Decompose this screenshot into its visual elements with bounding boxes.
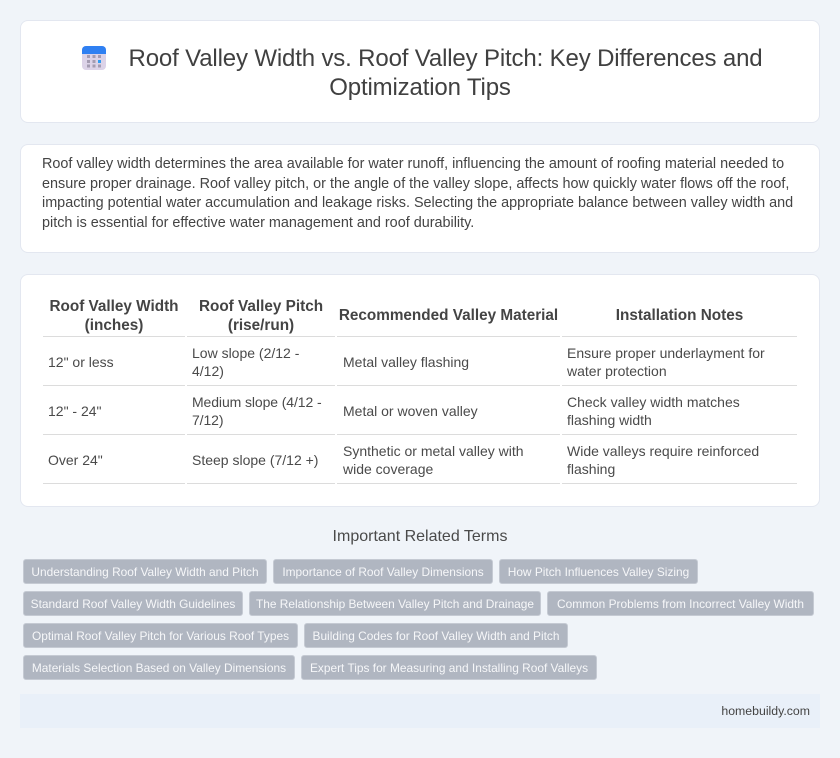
tag (547, 591, 814, 616)
tag (23, 623, 298, 648)
tag: Optimal Roof Valley Pitch for Various Roof Types (32, 629, 289, 643)
row 1 material: Metal valley flashing (343, 354, 469, 370)
column header: width: Roof Valley Width (49, 298, 179, 315)
column header: material: Recommended Valley Material (339, 307, 558, 324)
row 3 material: wide coverage (343, 461, 433, 477)
row 1 notes: water protection (567, 363, 667, 379)
row 2 width: 12" - 24" (48, 403, 102, 419)
column header: width (49, 298, 179, 334)
tag (301, 655, 597, 680)
related term tags (23, 559, 814, 680)
comparison table (43, 298, 797, 484)
intro panel (20, 144, 820, 253)
row 3 material (343, 443, 524, 477)
icon: calendar (82, 46, 106, 70)
tag (23, 591, 243, 616)
column header: width: (inches) (85, 317, 143, 334)
intro text: impacting potential water accumulation and leakage risks. Selecting the appropriate balance between valley width and (42, 195, 793, 211)
related terms heading: Important Related Terms (333, 528, 507, 545)
row 3 width: Over 24" (48, 452, 103, 468)
row 1 pitch: 4/12) (192, 363, 224, 379)
title: Optimization Tips (329, 74, 511, 101)
tag: Expert Tips for Measuring and Installing Roof Valleys (310, 661, 588, 675)
row 2 notes: flashing width (567, 412, 652, 428)
row 2 material: Metal or woven valley (343, 403, 478, 419)
tag: Standard Roof Valley Width Guidelines (31, 597, 235, 611)
tag: Building Codes for Roof Valley Width and Pitch (313, 629, 559, 643)
tag (23, 655, 295, 680)
intro text (42, 156, 793, 231)
row 2 pitch: Medium slope (4/12 - (192, 394, 322, 410)
tag: Common Problems from Incorrect Valley Width (557, 597, 804, 611)
column header: pitch: (rise/run) (228, 317, 294, 334)
row 1 pitch (192, 345, 299, 379)
tag: How Pitch Influences Valley Sizing (508, 565, 689, 579)
row 3 material: Synthetic or metal valley with (343, 443, 524, 459)
row 2 notes: Check valley width matches (567, 394, 740, 410)
row 1 notes: Ensure proper underlayment for (567, 345, 765, 361)
row 1 notes (567, 345, 765, 379)
column header: pitch: Roof Valley Pitch (199, 298, 323, 315)
tag (499, 559, 698, 584)
tag (304, 623, 568, 648)
column header: notes: Installation Notes (616, 307, 743, 324)
row 1 pitch: Low slope (2/12 - (192, 345, 299, 361)
header panel (20, 20, 820, 123)
row 3 notes: Wide valleys require reinforced (567, 443, 759, 459)
row 2 pitch: 7/12) (192, 412, 223, 428)
row 3 notes (567, 443, 759, 477)
table panel (20, 274, 820, 507)
row 3 notes: flashing (567, 461, 615, 477)
row 2 notes (567, 394, 740, 428)
intro text: Roof valley width determines the area available for water runoff, influencing the amount of roofing material needed to (42, 156, 784, 172)
column header: pitch (199, 298, 323, 334)
intro text: ensure proper drainage. Roof valley pitch, or the angle of the valley slope, affects how quickly water flows off the roof, (42, 176, 789, 192)
footer source: homebuildy.com (721, 704, 810, 718)
intro text: pitch is essential for effective water management and roof durability. (42, 215, 474, 231)
tag (249, 591, 541, 616)
tag (273, 559, 493, 584)
row 2 pitch (192, 394, 322, 428)
tag: Understanding Roof Valley Width and Pitch (31, 565, 259, 579)
title: Roof Valley Width vs. Roof Valley Pitch: Key Differences and (129, 45, 762, 72)
tag: Materials Selection Based on Valley Dimensions (32, 661, 286, 675)
row 1 width: 12" or less (48, 354, 114, 370)
tag: Importance of Roof Valley Dimensions (282, 565, 484, 579)
title (129, 45, 762, 101)
row 3 pitch: Steep slope (7/12 +) (192, 452, 318, 468)
tag: The Relationship Between Valley Pitch and Drainage (256, 597, 534, 611)
tag (23, 559, 267, 584)
footer bar (20, 694, 820, 728)
